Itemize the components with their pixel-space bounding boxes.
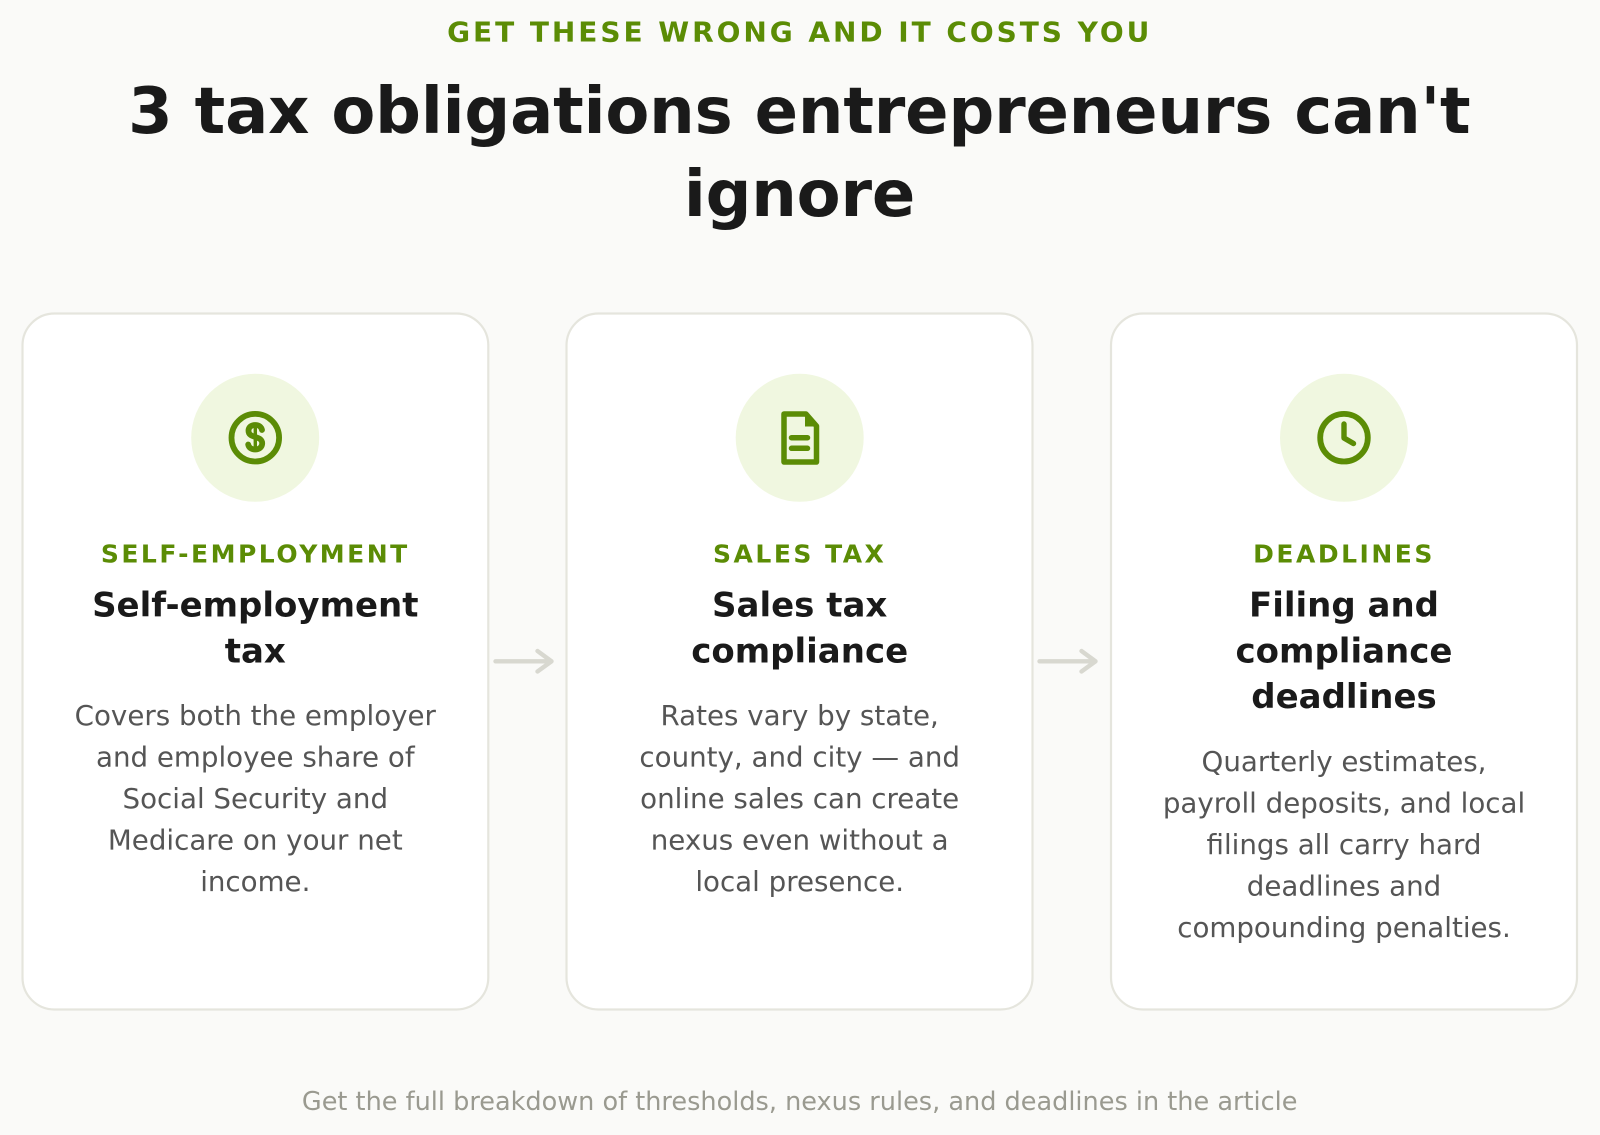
label: DEADLINES (1253, 540, 1435, 568)
eyebrow: GET THESE WRONG AND IT COSTS YOU (447, 16, 1152, 48)
title (128, 75, 1470, 232)
card heading (691, 586, 908, 672)
panel: deadlines (1111, 314, 1577, 1010)
icon: clock (1280, 374, 1408, 502)
card heading: compliance (1236, 632, 1452, 672)
card body text: county, and city — and (639, 741, 960, 774)
icon: dollar coin (191, 374, 319, 502)
card body text: nexus even without a (651, 824, 949, 856)
title: ignore (684, 158, 915, 232)
card body text: income. (200, 865, 310, 898)
arrow (496, 651, 552, 672)
footer note: Get the full breakdown of thresholds, nexus rules, and deadlines in the article (302, 1087, 1297, 1117)
card body text: Social Security and (123, 782, 388, 815)
card heading: deadlines (1251, 677, 1437, 717)
card body text: and employee share of (96, 741, 416, 774)
card heading (1236, 586, 1452, 717)
card heading: tax (225, 632, 286, 672)
icon: document (736, 374, 864, 502)
card body text: online sales can create (640, 782, 959, 815)
panel: sales tax (566, 314, 1032, 1010)
card body text: Quarterly estimates, (1202, 745, 1486, 778)
card body text: local presence. (695, 865, 904, 898)
panel: self-employment (22, 314, 488, 1010)
card body text (75, 699, 437, 898)
card body text (639, 699, 960, 898)
card heading: Self-employment (92, 586, 419, 626)
card body text: Medicare on your net (108, 824, 403, 856)
card body text: deadlines and (1247, 870, 1441, 902)
arrow (1040, 651, 1096, 672)
card body text: Rates vary by state, (661, 699, 939, 732)
card body text: Covers both the employer (75, 699, 437, 732)
card body text (1163, 745, 1525, 944)
card heading: compliance (691, 632, 908, 672)
title: 3 tax obligations entrepreneurs can't (128, 75, 1470, 149)
card body text: compounding penalties. (1177, 911, 1511, 944)
card heading (92, 586, 419, 672)
card heading: Filing and (1249, 586, 1439, 626)
card heading: Sales tax (712, 586, 887, 626)
label: SALES TAX (713, 540, 886, 568)
card body text: payroll deposits, and local (1163, 786, 1525, 819)
label: SELF-EMPLOYMENT (101, 540, 410, 568)
card body text: filings all carry hard (1207, 828, 1481, 861)
